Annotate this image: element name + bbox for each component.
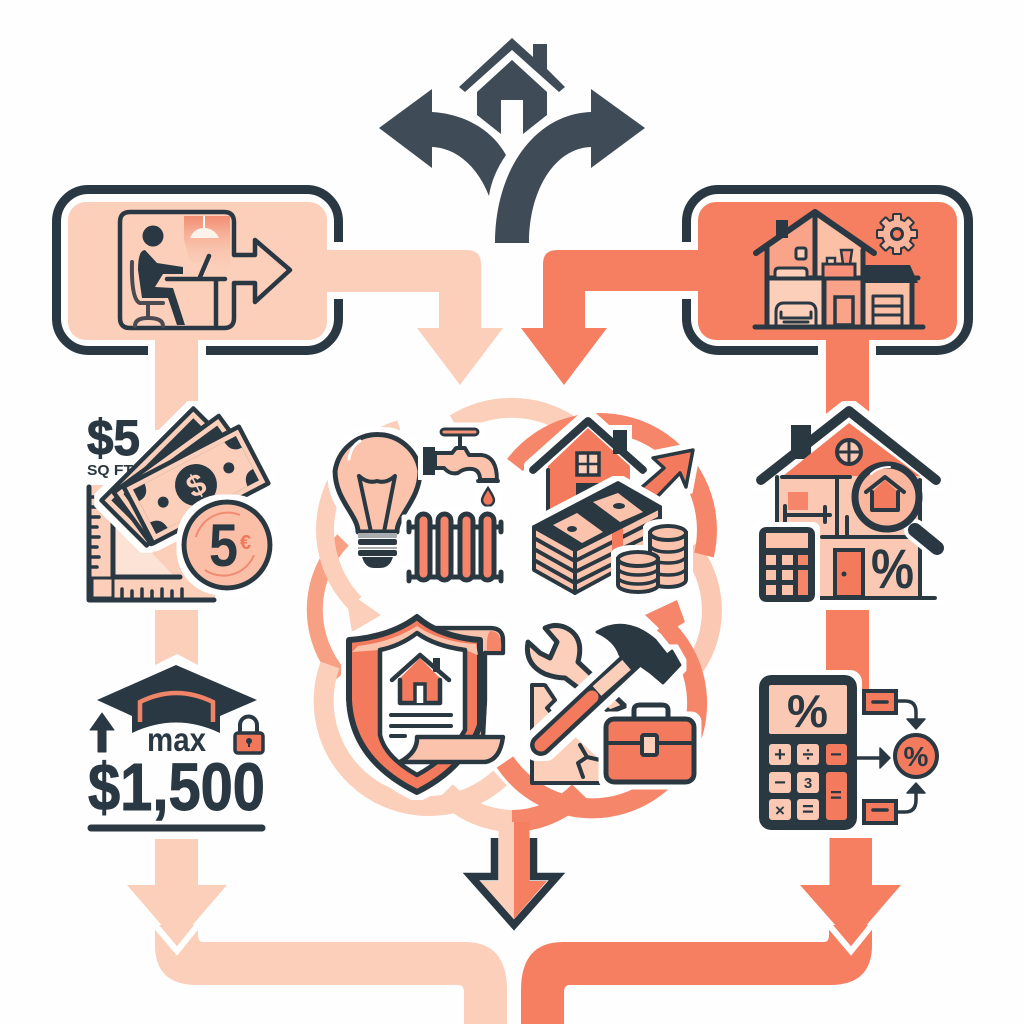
- icon: toolbox: [606, 705, 694, 782]
- text: max: max: [147, 721, 207, 758]
- icon: percent result circle: %: [904, 741, 929, 772]
- arrow: left column down arrow: [127, 839, 227, 943]
- icon: large calculator: ×: [775, 801, 785, 820]
- icon: person working at desk with exit arrow: [120, 212, 290, 328]
- icon: lamp light: [184, 216, 230, 275]
- icon: fanned bank notes: $: [180, 466, 212, 505]
- icon: five euro coin: [184, 502, 270, 588]
- text: $1,500: $1,500: [88, 750, 265, 825]
- icon: large calculator: =: [802, 799, 814, 821]
- icon group: education credit cap: [88, 665, 265, 828]
- icon: five euro coin: €: [240, 532, 251, 554]
- icon: magnifying glass: [855, 465, 937, 548]
- white gap under left arrow: [155, 925, 198, 951]
- icon: radiator: [409, 514, 501, 581]
- icon: up arrow: [90, 713, 114, 752]
- icon: house cross-section: [755, 212, 923, 327]
- icon: five euro coin: 5: [209, 512, 238, 579]
- icon: percent result circle: [895, 735, 937, 777]
- text: SQ FT: SQ FT: [87, 462, 133, 479]
- icon: house at crossroads with diverging arrows: [379, 38, 645, 243]
- icon: water tap with drop: [423, 429, 498, 506]
- icon: large calculator: −: [830, 744, 842, 766]
- icon: insurance shield with policy scroll: [349, 617, 503, 792]
- icon: graduation cap: [97, 665, 257, 733]
- icon: scroll bottom curl: [400, 737, 503, 762]
- icon: cracked wall: [532, 685, 602, 783]
- icon: top input with arrow: [864, 691, 925, 729]
- icon: large calculator: 3: [804, 775, 812, 792]
- central overlapping rings: [315, 408, 712, 821]
- flow band: bottom right route: [521, 838, 901, 1024]
- icon group: cost per square foot: [87, 408, 270, 600]
- icon: large calculator: =: [830, 785, 842, 807]
- icon: red house: [533, 421, 643, 520]
- text: $5: $5: [87, 410, 140, 466]
- icon: middle arrow: [857, 748, 890, 768]
- panel: home office: [56, 190, 338, 350]
- icon: large calculator: [759, 675, 857, 830]
- icon group: percentage calculator: [759, 675, 937, 830]
- policy text lines: [391, 715, 451, 736]
- icon: small calculator: [759, 527, 815, 602]
- icon: coin stacks: [618, 526, 686, 592]
- flow band: bottom left route: [127, 839, 507, 1024]
- icon: wrench: [527, 625, 625, 712]
- underline: [91, 824, 262, 832]
- icon: small house on policy: [392, 655, 449, 703]
- icon: large calculator: ÷: [803, 744, 814, 766]
- icon: large calculator: −: [774, 772, 786, 794]
- flow band: left panel to centre: [327, 250, 503, 385]
- icon: hammer: [541, 625, 680, 745]
- panel: whole house: [686, 190, 968, 350]
- arrow: central output arrow: [471, 822, 557, 925]
- white gap under right arrow: [829, 925, 872, 951]
- icon: light bulb: [335, 435, 420, 568]
- icon group: house inspection: [759, 411, 937, 602]
- icon: growth arrow: [641, 450, 693, 498]
- icon: inspected house: [761, 411, 936, 600]
- right column connectors: [826, 340, 869, 690]
- arrow: right column down arrow: [800, 838, 901, 943]
- icon group: home value and cash: [533, 421, 693, 593]
- icon: gear: [876, 213, 918, 255]
- icon: bottom input with arrow: [864, 783, 925, 823]
- icon: ruler square: [89, 485, 215, 600]
- icon: fanned bank notes: [101, 408, 268, 546]
- icon group: utilities bulb faucet radiator: [335, 429, 501, 581]
- icon: large calculator: +: [774, 744, 786, 766]
- icon: large calculator: %: [787, 685, 828, 737]
- icon: padlock: [235, 716, 263, 753]
- left column connectors: [155, 340, 198, 665]
- icon group: repairs tools: [527, 625, 694, 783]
- icon: inspected house: %: [871, 537, 914, 600]
- icon: stack of cash: [534, 483, 660, 593]
- flow band: right panel to centre: [521, 250, 698, 385]
